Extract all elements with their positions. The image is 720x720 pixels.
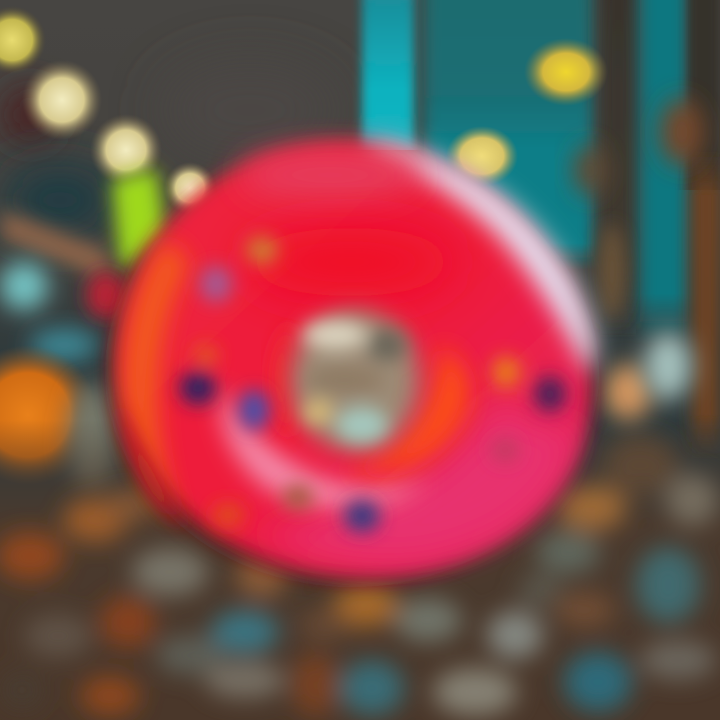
donut: white icing rim	[370, 140, 596, 375]
donut: deep red left edge	[118, 400, 185, 530]
donut: upper red shade	[245, 228, 455, 296]
donut: top crimson glow	[240, 149, 420, 201]
donut: orange left edge	[124, 240, 190, 520]
lights: bokeh string at upper left	[0, 0, 216, 214]
donut: orange inner glow	[345, 345, 469, 472]
donut: red inner left glow	[273, 320, 292, 440]
accent: lime green shape	[112, 168, 166, 272]
donut: hole	[291, 310, 419, 450]
lights: yellow bokeh at upper right	[446, 38, 608, 186]
accent: right side peach and pale highlight	[604, 332, 692, 420]
donut: hole highlights	[303, 321, 407, 443]
background: teal columns	[362, 0, 720, 460]
donut: pale pink diagonal band	[221, 385, 430, 508]
donut: shadow	[116, 168, 588, 576]
donut: magenta lower right	[260, 400, 575, 561]
accent: left side objects	[0, 210, 126, 498]
ground: bokeh pebbles	[0, 420, 720, 720]
donut	[116, 140, 596, 576]
donut: sprinkles	[180, 236, 566, 532]
donut: pink body	[116, 142, 590, 576]
